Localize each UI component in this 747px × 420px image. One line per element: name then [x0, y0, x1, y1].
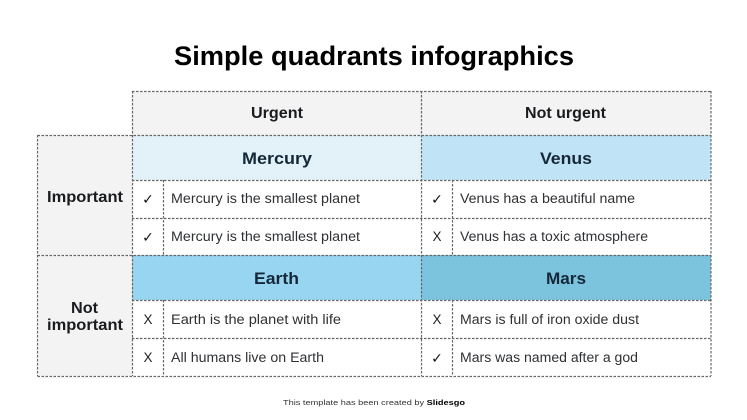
row: Mercury item 1: Mercury is the smallest planet [171, 191, 360, 206]
footer credit: This template has been created by Slidesgo [283, 398, 466, 407]
row: Mercury item 1: ✓ [142, 192, 154, 208]
row: Mars item 2: Mars was named after a god [460, 350, 638, 365]
row header: Not important: important [47, 317, 123, 334]
panel: Earth: Earth [254, 269, 299, 288]
row: Venus item 1: ✓ [431, 192, 443, 208]
row: Venus item 1: Venus has a beautiful name [460, 191, 635, 206]
row: Mercury item 2: Mercury is the smallest planet [171, 229, 360, 244]
row: Earth item 1: X [143, 312, 153, 327]
row: Venus item 2: Venus has a toxic atmosphere [460, 229, 648, 244]
column header: Urgent [132, 91, 422, 135]
column header: Not urgent: Not urgent [525, 105, 606, 122]
title: Simple quadrants infographics [174, 41, 574, 71]
panel: Venus: Venus [540, 149, 592, 168]
quadrant table [38, 91, 711, 376]
row: Mars item 1: Mars is full of iron oxide dust [460, 312, 639, 327]
panel: Venus [422, 135, 711, 244]
panel: Mars [422, 255, 711, 367]
row header: Important: Important [47, 189, 123, 206]
row: Venus item 2: X [432, 229, 442, 244]
panel: Mercury: Mercury [242, 149, 313, 168]
panel: Mars: Mars [546, 269, 586, 288]
row: Mars item 2: ✓ [431, 351, 443, 367]
row header: Not important [38, 255, 132, 376]
row header: Important [38, 135, 132, 255]
panel: Earth [132, 255, 422, 365]
row: Earth item 1: Earth is the planet with life [171, 312, 341, 327]
column header: Urgent: Urgent [251, 105, 303, 122]
row: Earth item 2: All humans live on Earth [171, 350, 324, 365]
panel: Mercury [132, 135, 422, 246]
row: Earth item 2: X [143, 350, 153, 365]
column header: Not urgent [422, 91, 711, 135]
row header: Not important: Not [71, 300, 98, 317]
row: Mars item 1: X [432, 312, 442, 327]
row: Mercury item 2: ✓ [142, 230, 154, 246]
